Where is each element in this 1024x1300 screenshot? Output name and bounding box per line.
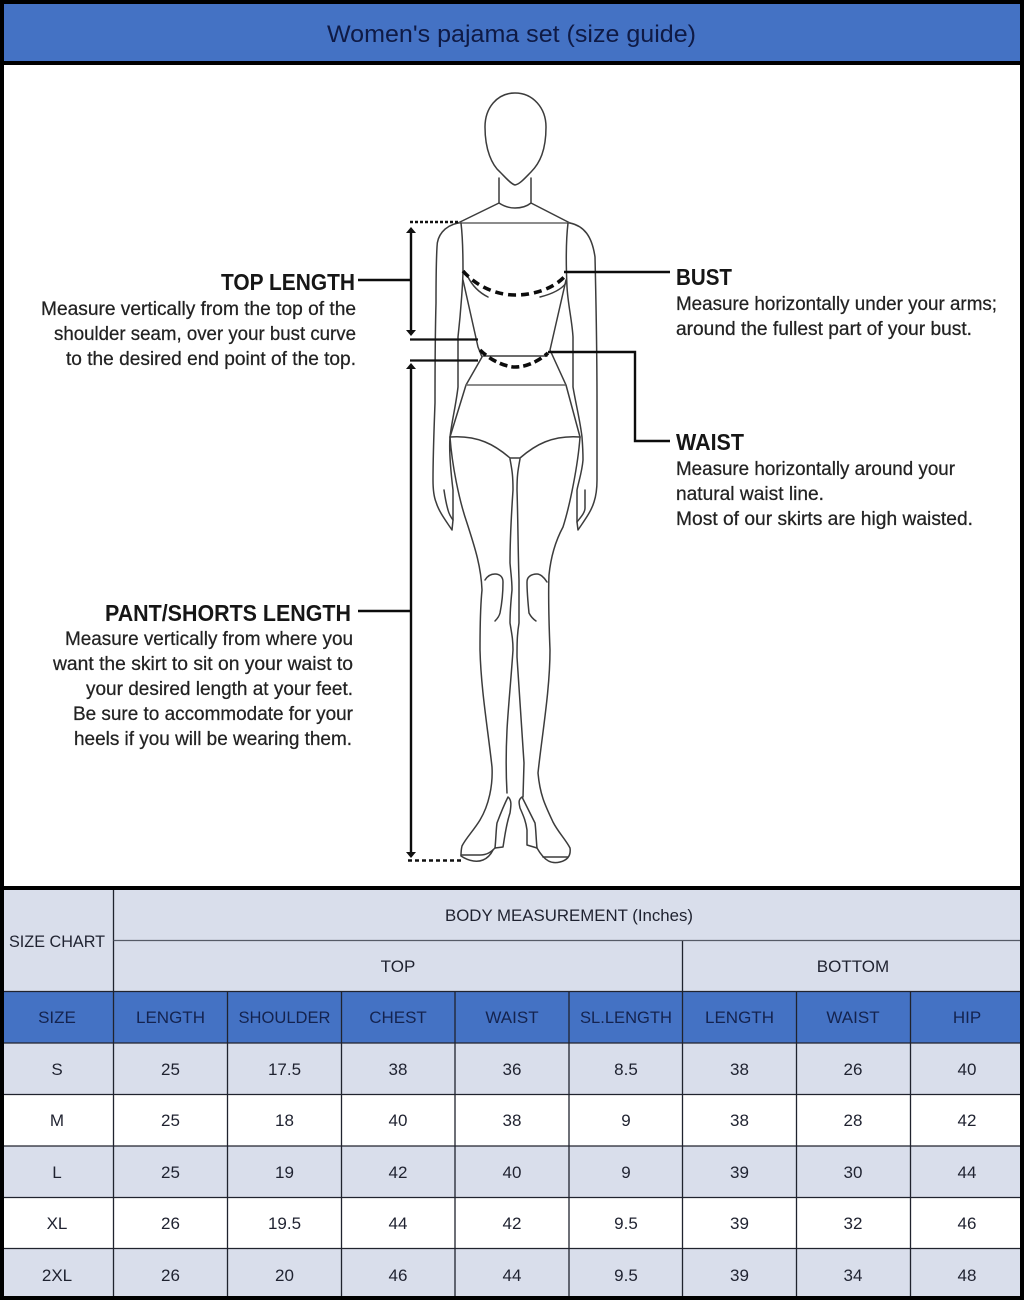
row: S: S: [51, 1060, 63, 1079]
text block: top length: to the desired end point of the top.: [66, 348, 356, 370]
column headers: LENGTH: [136, 1008, 205, 1027]
row: S: [51, 1060, 976, 1079]
row: 2XL: 44: [503, 1266, 521, 1285]
text block: waist: Most of our skirts are high waisted.: [676, 508, 973, 530]
text block: pant/shorts length: your desired length at your feet.: [86, 678, 353, 700]
text block: pant/shorts length: heels if you will be wearing them.: [74, 728, 352, 750]
waist dashed line: [480, 350, 548, 367]
text block: top length: [41, 269, 356, 370]
row: 2XL: 48: [958, 1266, 976, 1285]
table heading rows: SIZE CHART: [9, 932, 105, 951]
arrow: waist leader: [548, 352, 670, 441]
text block: bust: BUST: [676, 264, 732, 290]
row: L: [52, 1163, 976, 1182]
row: 2XL: 9.5: [614, 1266, 638, 1285]
column headers: SHOULDER: [238, 1008, 330, 1027]
text block: pant/shorts length: [52, 600, 353, 750]
row: XL: 44: [389, 1214, 407, 1233]
row: M: [50, 1111, 976, 1130]
row: S: 26: [844, 1060, 862, 1079]
column headers: WAIST: [826, 1008, 880, 1027]
text block: pant/shorts length: Measure vertically from where you: [65, 628, 353, 650]
text block: top length: Measure vertically from the top of the: [41, 298, 356, 320]
row: M: 42: [958, 1111, 976, 1130]
text block: waist: Measure horizontally around your: [676, 458, 955, 480]
row: S: 8.5: [614, 1060, 638, 1079]
column headers: SL.LENGTH: [580, 1008, 672, 1027]
row: XL: XL: [47, 1214, 67, 1233]
row: XL: 39: [730, 1214, 749, 1233]
column headers: SIZE: [38, 1008, 76, 1027]
row: S: 38: [730, 1060, 749, 1079]
row: XL: 32: [844, 1214, 862, 1233]
row: XL: 46: [958, 1214, 976, 1233]
row: 2XL: 26: [161, 1266, 180, 1285]
text block: waist: [676, 429, 973, 530]
row: 2XL: 39: [730, 1266, 749, 1285]
text block: top length: shoulder seam, over your bust curve: [54, 323, 356, 345]
row: 2XL: 46: [389, 1266, 407, 1285]
row: M: 9: [621, 1111, 631, 1130]
row: L: 19: [275, 1163, 294, 1182]
waist reference lines: [410, 340, 478, 360]
column headers: HIP: [953, 1008, 981, 1027]
row: L: 40: [503, 1163, 521, 1182]
text block: pant/shorts length: PANT/SHORTS LENGTH: [105, 600, 351, 626]
table heading rows: [9, 906, 889, 976]
column headers: [38, 1008, 981, 1027]
row: M: M: [50, 1111, 64, 1130]
row: XL: 9.5: [614, 1214, 638, 1233]
text block: bust: around the fullest part of your bust.: [676, 318, 972, 340]
column headers: LENGTH: [705, 1008, 774, 1027]
row: 2XL: 2XL: [42, 1266, 72, 1285]
row: S: 17.5: [268, 1060, 301, 1079]
table backgrounds: [4, 890, 1020, 1296]
row: 2XL: [42, 1266, 976, 1285]
row: L: 25: [161, 1163, 180, 1182]
row: S: 36: [503, 1060, 521, 1079]
text block: pant/shorts length: Be sure to accommodate for your: [73, 703, 353, 725]
row: XL: 42: [503, 1214, 521, 1233]
row: XL: [47, 1214, 976, 1233]
arrow: pant length leader: [358, 363, 463, 860]
row: M: 38: [730, 1111, 749, 1130]
text block: top length: TOP LENGTH: [221, 269, 355, 295]
title banner: Women's pajama set (size guide): [327, 21, 696, 48]
row: S: 25: [161, 1060, 180, 1079]
row: L: 44: [958, 1163, 976, 1182]
row: M: 28: [844, 1111, 862, 1130]
row: L: 42: [389, 1163, 407, 1182]
row: S: 40: [958, 1060, 976, 1079]
table heading rows: BODY MEASUREMENT (Inches): [445, 906, 693, 925]
table heading rows: TOP: [381, 957, 415, 976]
row: M: 38: [503, 1111, 521, 1130]
arrow: bust leader: [564, 271, 670, 273]
arrow: top length leader: [358, 222, 458, 336]
row: 2XL: 20: [275, 1266, 294, 1285]
row: M: 40: [389, 1111, 407, 1130]
row: L: L: [52, 1163, 62, 1182]
column headers: CHEST: [369, 1008, 427, 1027]
row: XL: 19.5: [268, 1214, 301, 1233]
row: L: 9: [621, 1163, 631, 1182]
icon: body figure outline: [433, 93, 597, 863]
text block: waist: WAIST: [676, 429, 744, 455]
size chart table: [4, 890, 1020, 1296]
row: M: 18: [275, 1111, 294, 1130]
row: S: 38: [389, 1060, 407, 1079]
text block: bust: [676, 264, 997, 340]
bust dashed line: [463, 271, 566, 295]
text block: waist: natural waist line.: [676, 483, 824, 505]
panel: measurement diagram: [4, 65, 1020, 886]
row: M: 25: [161, 1111, 180, 1130]
text block: bust: Measure horizontally under your arms;: [676, 293, 997, 315]
text block: pant/shorts length: want the skirt to sit on your waist to: [52, 653, 353, 675]
row: L: 39: [730, 1163, 749, 1182]
title banner: [4, 4, 1020, 61]
table heading rows: BOTTOM: [817, 957, 889, 976]
row: L: 30: [844, 1163, 862, 1182]
column headers: WAIST: [485, 1008, 539, 1027]
row: XL: 26: [161, 1214, 180, 1233]
row: 2XL: 34: [844, 1266, 862, 1285]
